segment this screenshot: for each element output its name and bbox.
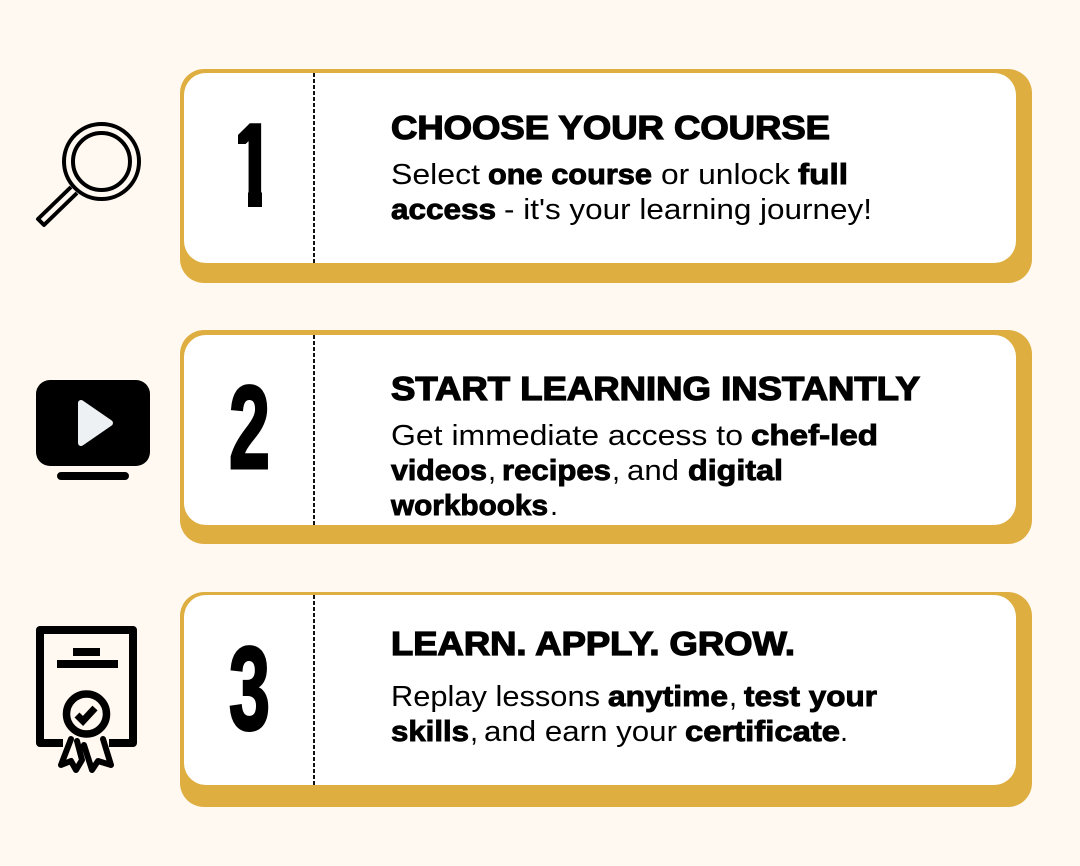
description 1: access: [391, 194, 496, 226]
panel: step 3 learn apply grow: [180, 592, 1032, 807]
description 3: ,: [470, 716, 478, 748]
description 3: skills: [391, 716, 469, 748]
step number 2: 2: [229, 362, 270, 494]
step number 1: 1: [232, 100, 274, 232]
description 3: test your: [744, 681, 877, 713]
description 2: ,: [612, 455, 620, 487]
card frame 3: [180, 592, 1032, 807]
card frame 2: [180, 330, 1032, 544]
description 3: ,: [729, 681, 737, 713]
description 2: workbooks: [390, 490, 548, 522]
description 3: certificate: [685, 716, 840, 748]
description 1: one course: [488, 159, 652, 191]
description 3: and earn your: [484, 716, 677, 748]
description 2: videos: [391, 455, 487, 487]
description 2: .: [550, 490, 558, 522]
step number 3: 3: [229, 623, 270, 755]
description 2: digital: [688, 455, 783, 487]
description 1: - it's your learning journey!: [504, 194, 872, 226]
description 1: Select: [391, 159, 480, 191]
panel: step 1 choose your course: [180, 69, 1032, 283]
description 2: Get immediate access to: [391, 420, 743, 452]
card body 2: [184, 335, 1016, 525]
icon: magnifying glass: [38, 124, 139, 225]
description 3: [391, 681, 877, 748]
description 1: [391, 159, 872, 226]
card body 1: [184, 73, 1016, 263]
description 1: or unlock: [661, 159, 791, 191]
description 2: [390, 420, 878, 522]
icon: certificate with ribbon: [40, 630, 133, 770]
heading 1: CHOOSE YOUR COURSE: [391, 109, 830, 146]
description 2: recipes: [502, 455, 611, 487]
card frame 1: [180, 69, 1032, 283]
description 2: ,: [488, 455, 496, 487]
heading 3: LEARN. APPLY. GROW.: [391, 625, 795, 662]
description 3: anytime: [608, 681, 728, 713]
description 3: .: [840, 716, 848, 748]
panel: step 2 start learning instantly: [180, 330, 1032, 544]
icon: video play screen: [36, 380, 150, 480]
heading 2: START LEARNING INSTANTLY: [391, 370, 920, 407]
description 3: Replay lessons: [391, 681, 600, 713]
description 2: chef-led: [751, 420, 878, 452]
card body 3: [184, 595, 1016, 785]
description 2: and: [627, 455, 679, 487]
description 1: full: [798, 159, 848, 191]
